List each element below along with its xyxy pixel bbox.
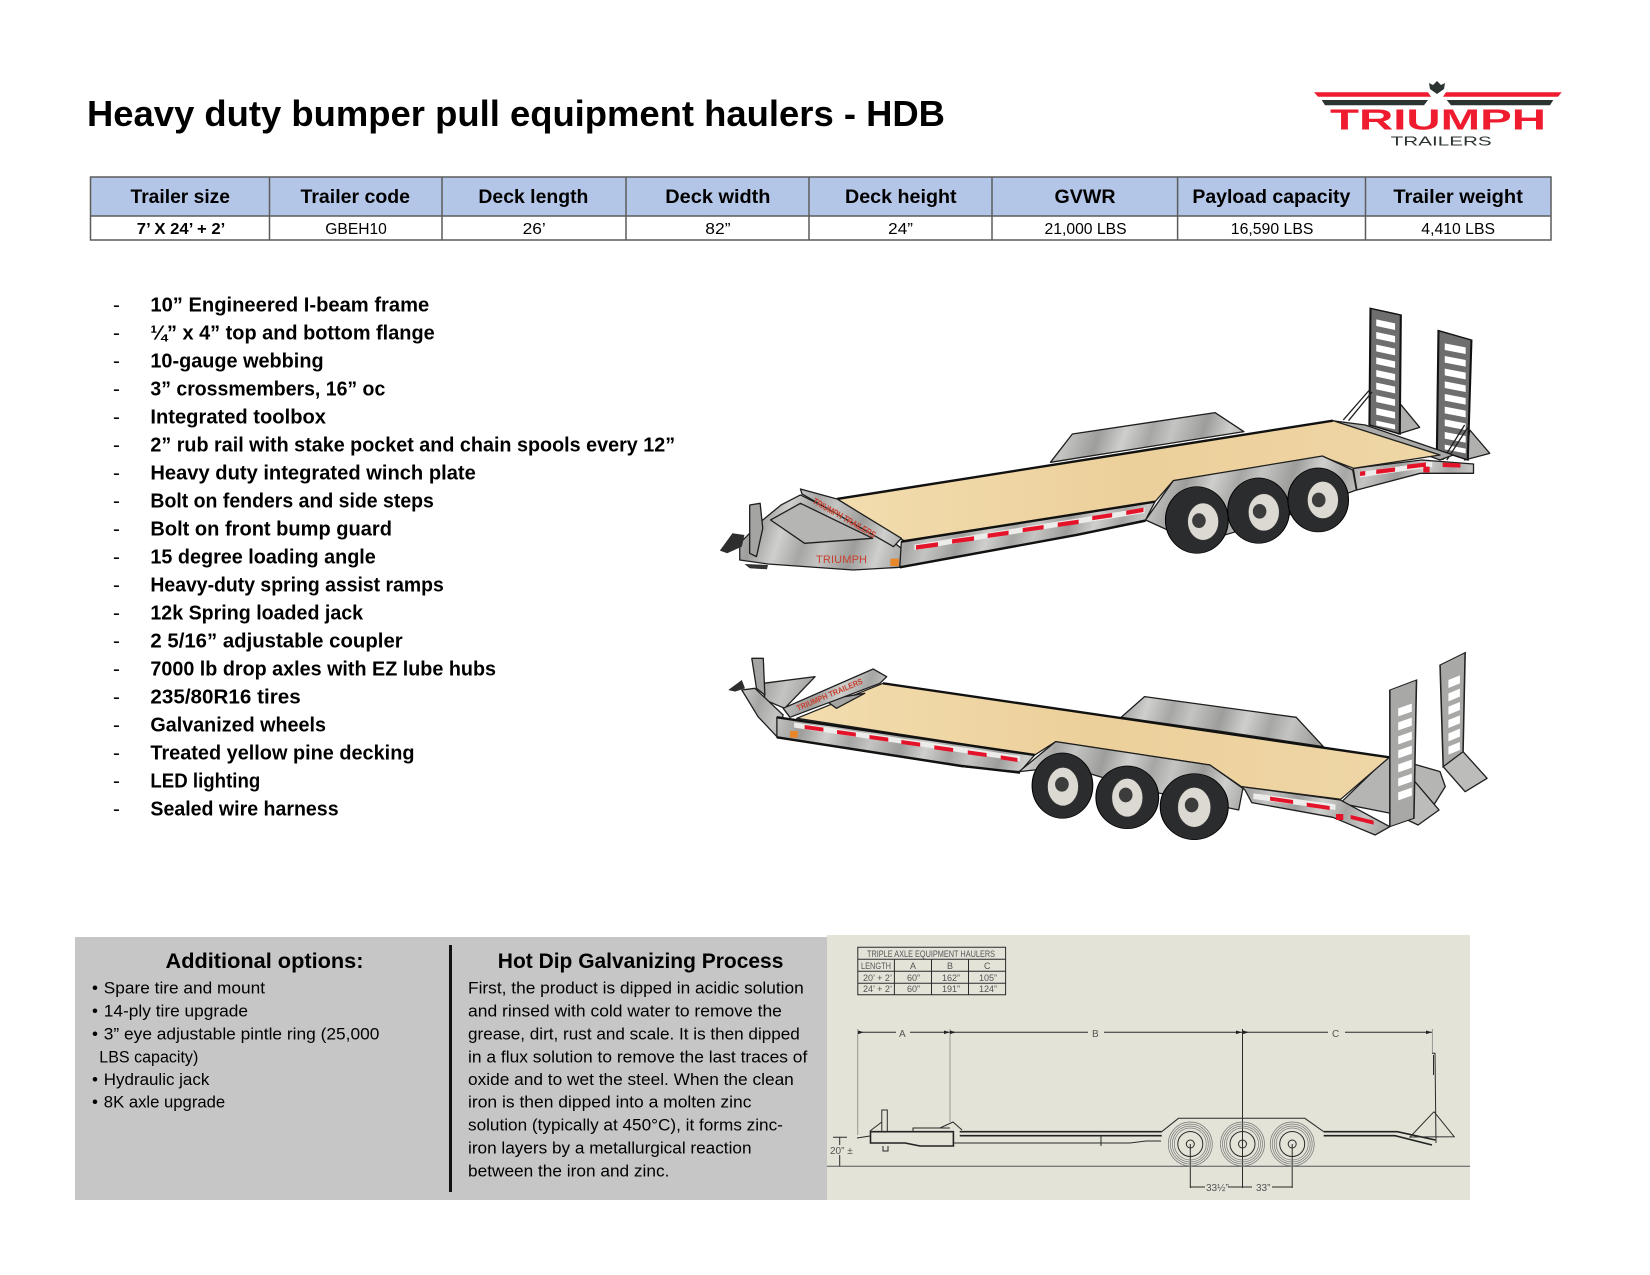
heading: Hot Dip Galvanizing Process bbox=[498, 950, 783, 973]
dimension table: A bbox=[910, 961, 916, 971]
header labels: Deck length bbox=[478, 187, 588, 208]
feature list: 7000 lb drop axles with EZ lube hubs bbox=[150, 657, 496, 680]
feature list bbox=[113, 294, 675, 820]
feature list: - bbox=[113, 378, 120, 401]
near ramp support bbox=[1393, 782, 1439, 825]
wheel 3 bbox=[1288, 468, 1349, 532]
feature list: Integrated toolbox bbox=[150, 406, 327, 429]
dimension table: 105” bbox=[979, 973, 997, 983]
panel: additional options: • bbox=[92, 978, 98, 997]
rear frame bbox=[1241, 787, 1390, 835]
dimension table: LENGTH bbox=[861, 961, 891, 971]
right ramp bbox=[1437, 331, 1471, 460]
orange marker bbox=[890, 559, 899, 566]
orange marker bbox=[790, 731, 798, 738]
feature list: - bbox=[113, 462, 120, 485]
feature list: Treated yellow pine decking bbox=[150, 741, 414, 764]
spec table bbox=[90, 177, 1551, 240]
dimension table: C bbox=[984, 961, 991, 971]
jack foot bbox=[744, 564, 768, 569]
wheel 1 bbox=[1032, 753, 1093, 818]
feature list: - bbox=[113, 434, 120, 457]
axle spacing dimensions bbox=[1190, 1183, 1292, 1194]
toolbox lid bbox=[825, 693, 865, 708]
headboard lettering, trailer 1: TRIUMPH TRAILERS bbox=[811, 496, 878, 540]
dimension table bbox=[858, 947, 1006, 995]
side frame bbox=[900, 502, 1155, 567]
wheel 1 bbox=[1168, 1122, 1212, 1166]
logo subtitle: TRAILERS bbox=[1391, 133, 1492, 148]
dimension table: 24’ + 2’ bbox=[863, 984, 892, 994]
rub rail bbox=[777, 717, 1035, 773]
panel: additional options: 3” eye adjustable pintle ring (25,000 bbox=[104, 1024, 379, 1043]
feature list: - bbox=[113, 322, 120, 345]
near fender bbox=[1146, 456, 1356, 543]
feature list: - bbox=[113, 406, 120, 429]
value row: 82” bbox=[705, 221, 730, 238]
feature list: Heavy-duty spring assist ramps bbox=[150, 574, 444, 596]
panel: hot dip galvanizing process bbox=[468, 950, 808, 1180]
panel: additional options bbox=[92, 950, 379, 1111]
tongue and jack bbox=[857, 1110, 962, 1151]
feature list: - bbox=[113, 741, 120, 764]
feature list: 15 degree loading angle bbox=[150, 546, 376, 568]
feature list: 2 5/16” adjustable coupler bbox=[150, 630, 403, 652]
table header band bbox=[90, 177, 1551, 216]
tongue top plate bbox=[763, 677, 815, 708]
deck bbox=[797, 683, 1389, 799]
divider bbox=[449, 945, 452, 1192]
dimension table: 60” bbox=[907, 973, 920, 983]
coupler bbox=[728, 680, 745, 692]
feature list: - bbox=[113, 574, 120, 596]
feature list: 12k Spring loaded jack bbox=[150, 602, 364, 624]
dark wing stripes bbox=[1322, 100, 1553, 105]
header labels: Payload capacity bbox=[1192, 187, 1351, 208]
left ramp bbox=[1369, 308, 1401, 434]
value row bbox=[137, 221, 1495, 238]
feature list: - bbox=[113, 685, 120, 708]
panel: additional options: Spare tire and mount bbox=[104, 978, 265, 997]
side frame bbox=[777, 717, 1035, 772]
tongue lettering, trailer 1: TRIUMPH bbox=[816, 554, 867, 566]
feature list: 3” crossmembers, 16” oc bbox=[150, 378, 385, 401]
side reflectors bbox=[805, 725, 1374, 825]
wheel 1 bbox=[1165, 487, 1228, 553]
deck frame bbox=[953, 1132, 1435, 1146]
far fender bbox=[1050, 413, 1244, 462]
panel: additional options: • bbox=[92, 1070, 98, 1089]
rub rail bbox=[900, 502, 1155, 567]
header labels: Deck height bbox=[845, 187, 957, 208]
far fender bbox=[1121, 697, 1323, 747]
rub rail band bbox=[794, 722, 1020, 761]
wheel 2 bbox=[1220, 1122, 1264, 1166]
feature list: 235/80R16 tires bbox=[150, 685, 301, 708]
near ramp bbox=[1390, 680, 1417, 827]
feature list: - bbox=[113, 713, 120, 736]
panel: additional options: • bbox=[92, 1092, 98, 1111]
deck bbox=[837, 421, 1440, 541]
feature list: - bbox=[113, 350, 120, 373]
panel: additional options: 14-ply tire upgrade bbox=[104, 1001, 248, 1020]
headboard bbox=[783, 669, 887, 717]
axle spacing dimensions: 33” bbox=[1256, 1183, 1270, 1194]
right ramp support bbox=[1465, 430, 1490, 460]
header labels: GVWR bbox=[1054, 187, 1116, 208]
overall dimension lines bbox=[858, 1029, 1432, 1188]
axle spacing dimensions: 33½” bbox=[1206, 1183, 1229, 1194]
header labels: Deck width bbox=[665, 187, 770, 208]
left ramp support bbox=[1398, 403, 1420, 434]
feature list: - bbox=[113, 769, 120, 792]
height dimension bbox=[830, 1137, 853, 1166]
trailer illustration: rear three-quarter view, ramps at right bbox=[720, 308, 1490, 570]
feature list: Bolt on fenders and side steps bbox=[150, 490, 434, 513]
feature list: - bbox=[113, 518, 120, 540]
feature list: Bolt on front bump guard bbox=[150, 518, 392, 540]
feature list: - bbox=[113, 294, 120, 317]
feature list: - bbox=[113, 657, 120, 680]
feature list: - bbox=[113, 797, 120, 820]
icon: crown bbox=[1429, 81, 1445, 94]
panel: hot dip galvanizing process: oxide and to wet the steel. When the clean bbox=[468, 1070, 794, 1089]
feature list: - bbox=[113, 602, 120, 624]
feature list: LED lighting bbox=[150, 769, 260, 792]
overall dimension lines: A bbox=[899, 1029, 906, 1040]
rear rail band bbox=[1253, 793, 1335, 810]
ground line bbox=[827, 1165, 1470, 1167]
feature list: 2” rub rail with stake pocket and chain spools every 12” bbox=[150, 434, 675, 457]
panel: hot dip galvanizing process: between the iron and zinc. bbox=[468, 1161, 669, 1180]
title: Heavy duty bumper pull equipment haulers - HDB bbox=[87, 93, 945, 134]
feature list: - bbox=[113, 546, 120, 568]
coupler bbox=[720, 533, 744, 553]
trailer illustration: front three-quarter view, wheels forward bbox=[728, 653, 1487, 840]
rub rail band bbox=[914, 508, 1145, 550]
feature list: - bbox=[113, 630, 120, 652]
tongue rail bbox=[742, 688, 783, 737]
deck far edge bbox=[883, 683, 1389, 757]
feature list: 10” Engineered I-beam frame bbox=[150, 294, 429, 317]
dimension table: 162” bbox=[942, 973, 960, 983]
header labels: Trailer size bbox=[130, 187, 230, 208]
feature list: 10-gauge webbing bbox=[150, 350, 324, 373]
wheel 3 bbox=[1160, 774, 1228, 840]
value row: 7’ X 24’ + 2’ bbox=[137, 221, 225, 238]
heading: Additional options: bbox=[166, 950, 364, 973]
rear frame bbox=[1353, 460, 1474, 490]
feature list: Heavy duty integrated winch plate bbox=[150, 462, 476, 485]
value row: 16,590 LBS bbox=[1231, 221, 1313, 238]
logo: Triumph Trailers bbox=[1314, 81, 1562, 148]
jack bbox=[752, 658, 765, 695]
value row: 24” bbox=[888, 221, 913, 238]
dimension table: 191” bbox=[942, 984, 960, 994]
panel: technical side-view drawing bbox=[827, 935, 1470, 1200]
feature list: - bbox=[113, 490, 120, 513]
dimension table: B bbox=[947, 961, 953, 971]
ramp bbox=[1410, 1053, 1454, 1143]
dimension table: TRIPLE AXLE EQUIPMENT HAULERS bbox=[867, 949, 995, 959]
front angled plate bbox=[771, 503, 873, 543]
header labels: Trailer code bbox=[300, 187, 410, 208]
jack bbox=[750, 503, 763, 557]
value row: 26’ bbox=[523, 221, 546, 238]
wheel 2 bbox=[1228, 478, 1289, 543]
panel: grey options and process background bbox=[75, 937, 828, 1200]
header labels: Trailer weight bbox=[1393, 187, 1524, 208]
panel: additional options: Hydraulic jack bbox=[104, 1070, 210, 1089]
panel: hot dip galvanizing process: iron layers by a metallurgical reaction bbox=[468, 1138, 752, 1157]
dimension table: 124” bbox=[979, 984, 997, 994]
ramp struts bbox=[1343, 390, 1468, 460]
logo wordmark: TRIUMPH bbox=[1330, 104, 1546, 136]
value row: 4,410 LBS bbox=[1421, 221, 1495, 238]
front platform and tongue bbox=[740, 495, 901, 570]
panel: hot dip galvanizing process: iron is then dipped into a molten zinc bbox=[468, 1092, 752, 1111]
feature list: ¼” x 4” top and bottom flange bbox=[150, 322, 435, 345]
panel: additional options: 8K axle upgrade bbox=[104, 1092, 225, 1111]
panel: hot dip galvanizing process: First, the product is dipped in acidic solution bbox=[468, 978, 804, 997]
panel: hot dip galvanizing process: solution (typically at 450°C), it forms zinc- bbox=[468, 1115, 783, 1134]
wheel 3 bbox=[1270, 1122, 1314, 1166]
beavertail bbox=[1340, 757, 1445, 820]
far ramp support bbox=[1443, 752, 1487, 792]
panel: hot dip galvanizing process: in a flux solution to remove the last traces of bbox=[468, 1047, 808, 1066]
fender bbox=[1162, 1118, 1324, 1132]
side reflectors bbox=[916, 462, 1460, 550]
dimension table: 20’ + 2’ bbox=[863, 973, 892, 983]
feature list: Galvanized wheels bbox=[150, 713, 326, 736]
overall dimension lines: C bbox=[1332, 1029, 1339, 1040]
height dimension: 20” ± bbox=[830, 1146, 853, 1157]
headboard bbox=[800, 489, 901, 547]
headboard lettering, trailer 2: TRIUMPH TRAILERS bbox=[795, 677, 865, 713]
panel: additional options: • bbox=[92, 1024, 98, 1043]
header labels bbox=[130, 187, 1524, 208]
feature list: Sealed wire harness bbox=[150, 797, 339, 820]
value row: GBEH10 bbox=[325, 221, 387, 238]
wheel 2 bbox=[1096, 766, 1159, 829]
panel: additional options: LBS capacity) bbox=[99, 1047, 198, 1066]
panel: additional options: • bbox=[92, 1001, 98, 1020]
panel: hot dip galvanizing process: grease, dirt, rust and scale. It is then dipped bbox=[468, 1024, 800, 1043]
far ramp bbox=[1440, 653, 1465, 767]
overall dimension lines: B bbox=[1092, 1029, 1099, 1040]
rear beavertail bbox=[1332, 421, 1453, 460]
near fender bbox=[1019, 742, 1243, 810]
deck edge bbox=[837, 421, 1333, 499]
rear rail band bbox=[1360, 462, 1432, 477]
panel: hot dip galvanizing process: and rinsed with cold water to remove the bbox=[468, 1001, 782, 1020]
dimension table: 60” bbox=[907, 984, 920, 994]
value row: 21,000 LBS bbox=[1044, 221, 1127, 238]
logo red wings bbox=[1314, 92, 1562, 97]
